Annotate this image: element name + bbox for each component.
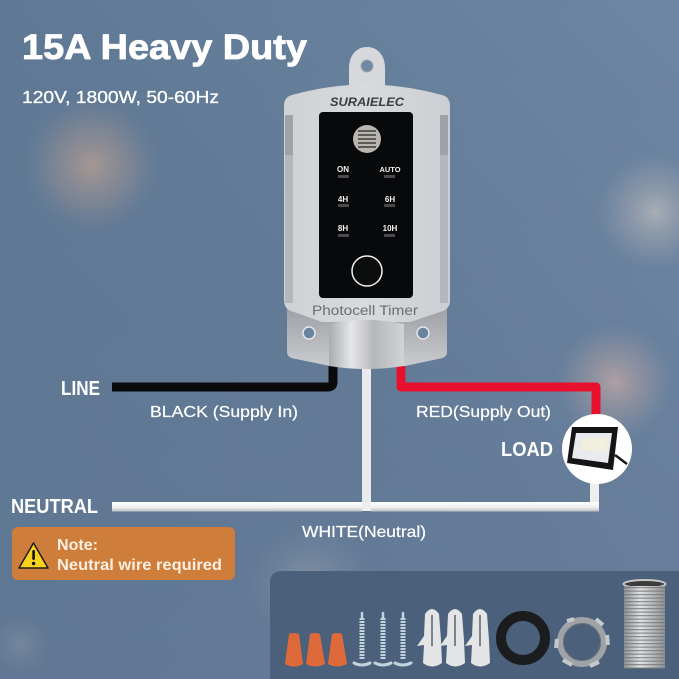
mode labels — [337, 165, 401, 233]
label: line: LINE — [61, 378, 100, 400]
icon: flood light load — [562, 414, 632, 484]
label: black wire: BLACK (Supply In) — [150, 404, 298, 421]
black control panel — [319, 112, 413, 298]
title: 15A Heavy Duty — [22, 28, 308, 67]
mode labels: 8H — [338, 224, 348, 233]
brand: SURAIELEC — [330, 97, 405, 109]
touch button — [352, 256, 382, 286]
mode labels: 10H — [383, 224, 398, 233]
callout: neutral wire note — [12, 527, 235, 580]
icon: wall anchors — [417, 609, 490, 666]
lower flange — [287, 308, 447, 366]
icon: rubber gasket — [501, 616, 545, 660]
icon: screws — [354, 613, 411, 665]
icon: wire nuts — [285, 633, 347, 666]
LED indicators — [338, 175, 395, 237]
callout: neutral wire note: Note: — [57, 537, 98, 554]
wire: red supply out — [401, 366, 596, 420]
label: neutral: NEUTRAL — [11, 495, 98, 518]
icon: lock nut — [556, 619, 608, 666]
subtitle: electrical ratings: 120V, 1800W, 50-60Hz — [22, 87, 219, 107]
label: red wire: RED(Supply Out) — [416, 404, 551, 421]
wire: white neutral — [112, 366, 599, 512]
side slots — [285, 115, 293, 303]
mode labels: 6H — [385, 195, 395, 204]
label: white wire: WHITE(Neutral) — [302, 524, 426, 541]
mode labels: AUTO — [379, 165, 401, 174]
icon: light sensor — [353, 125, 381, 153]
panel: included accessories — [270, 571, 679, 679]
mode labels: 4H — [338, 195, 348, 204]
icon: threaded conduit — [624, 580, 666, 670]
callout: neutral wire note: Neutral wire required — [57, 557, 222, 574]
mounting tab — [349, 47, 385, 90]
label: load: LOAD — [501, 439, 553, 461]
wire: black supply in — [112, 365, 333, 387]
conduit fitting — [329, 320, 404, 369]
device label: Photocell Timer — [312, 303, 419, 318]
icon: warning triangle — [19, 543, 48, 568]
device: photocell timer — [284, 47, 450, 369]
main housing — [284, 84, 450, 322]
mode labels: ON — [337, 165, 349, 174]
